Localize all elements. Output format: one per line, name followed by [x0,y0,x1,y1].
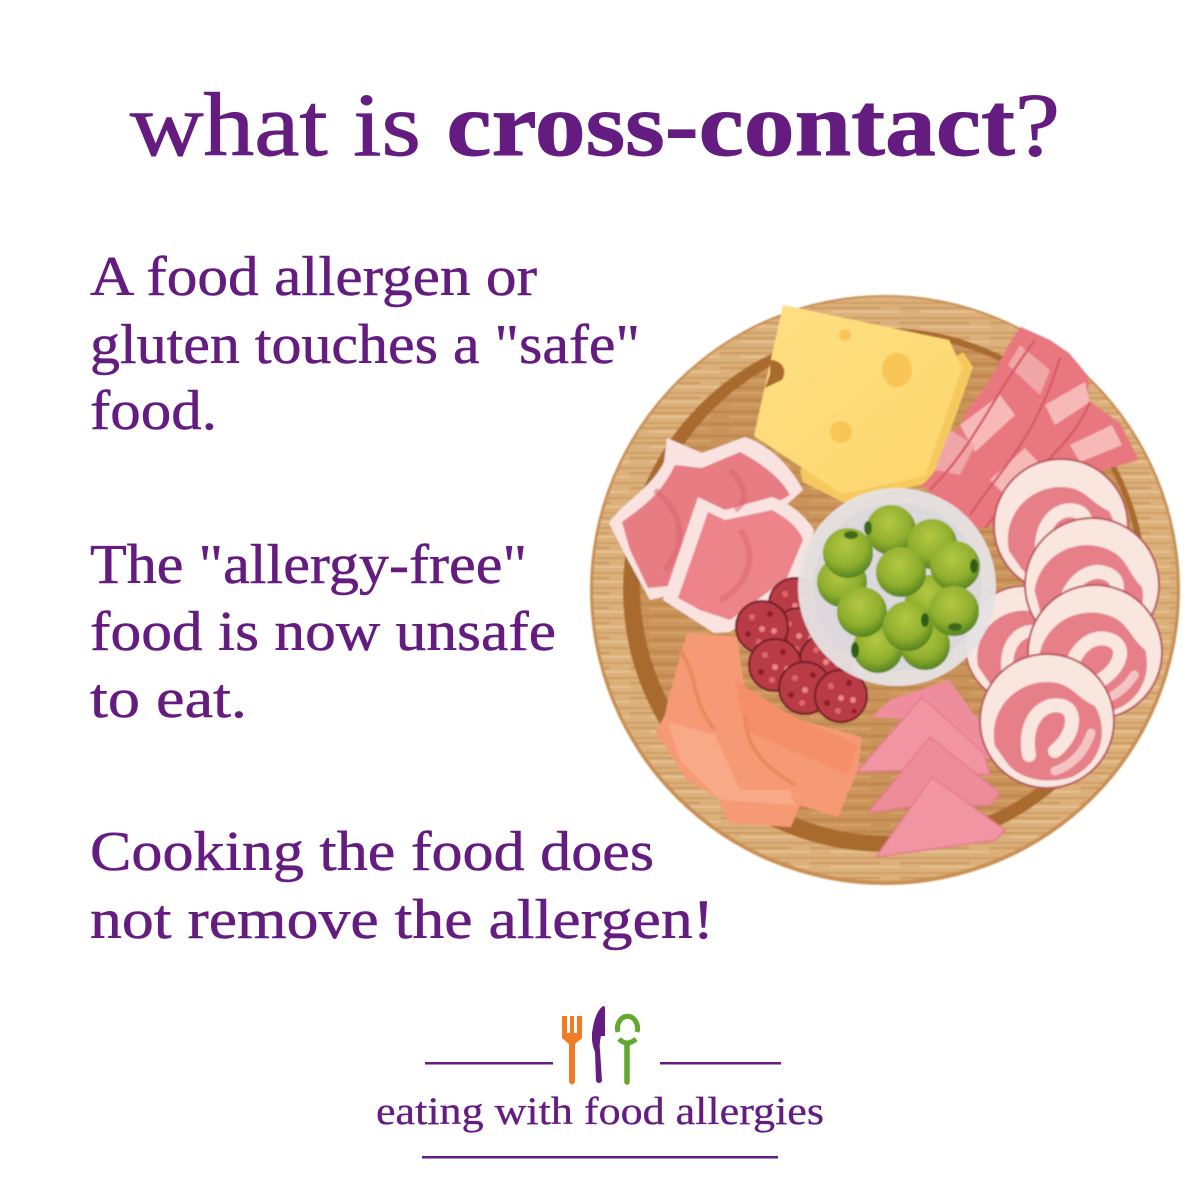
title: what is cross-contact ? [130,76,1060,175]
text block: what happens [90,246,640,442]
meat rolls [964,458,1179,789]
icon: knife [592,1006,605,1083]
logo: eating with food allergies [376,1006,824,1158]
text block: what happens: food. [90,380,217,442]
logo rule left [425,1062,553,1064]
salami slices [736,578,867,722]
logo rule right [660,1062,781,1064]
logo rule bottom [422,1156,778,1158]
bowl of green olives [798,488,996,686]
text block: food is unsafe: to eat. [90,668,247,730]
smoked salmon [656,633,862,827]
text block: cooking warning: Cooking the food does [90,821,654,883]
bacon strips [922,327,1139,530]
illustration: charcuterie board [590,295,1180,885]
ham slices [609,437,814,633]
text block: what happens: A food allergen or [90,246,537,308]
wooden plate [590,295,1180,885]
text block: what happens: gluten touches a "safe" [90,314,640,376]
text block: food is unsafe: The "allergy-free" [90,534,527,596]
logo wordmark: eating with food allergies [376,1090,824,1133]
text block: cooking warning [90,821,714,951]
text block: cooking warning: not remove the allergen! [90,889,714,951]
icon: spoon [617,1016,637,1082]
cheese slices [754,305,973,503]
text block: food is unsafe: food is now unsafe [90,601,556,663]
icon: fork [562,1016,582,1084]
text block: food is unsafe [90,534,556,730]
mortadella wedges [857,680,1005,857]
